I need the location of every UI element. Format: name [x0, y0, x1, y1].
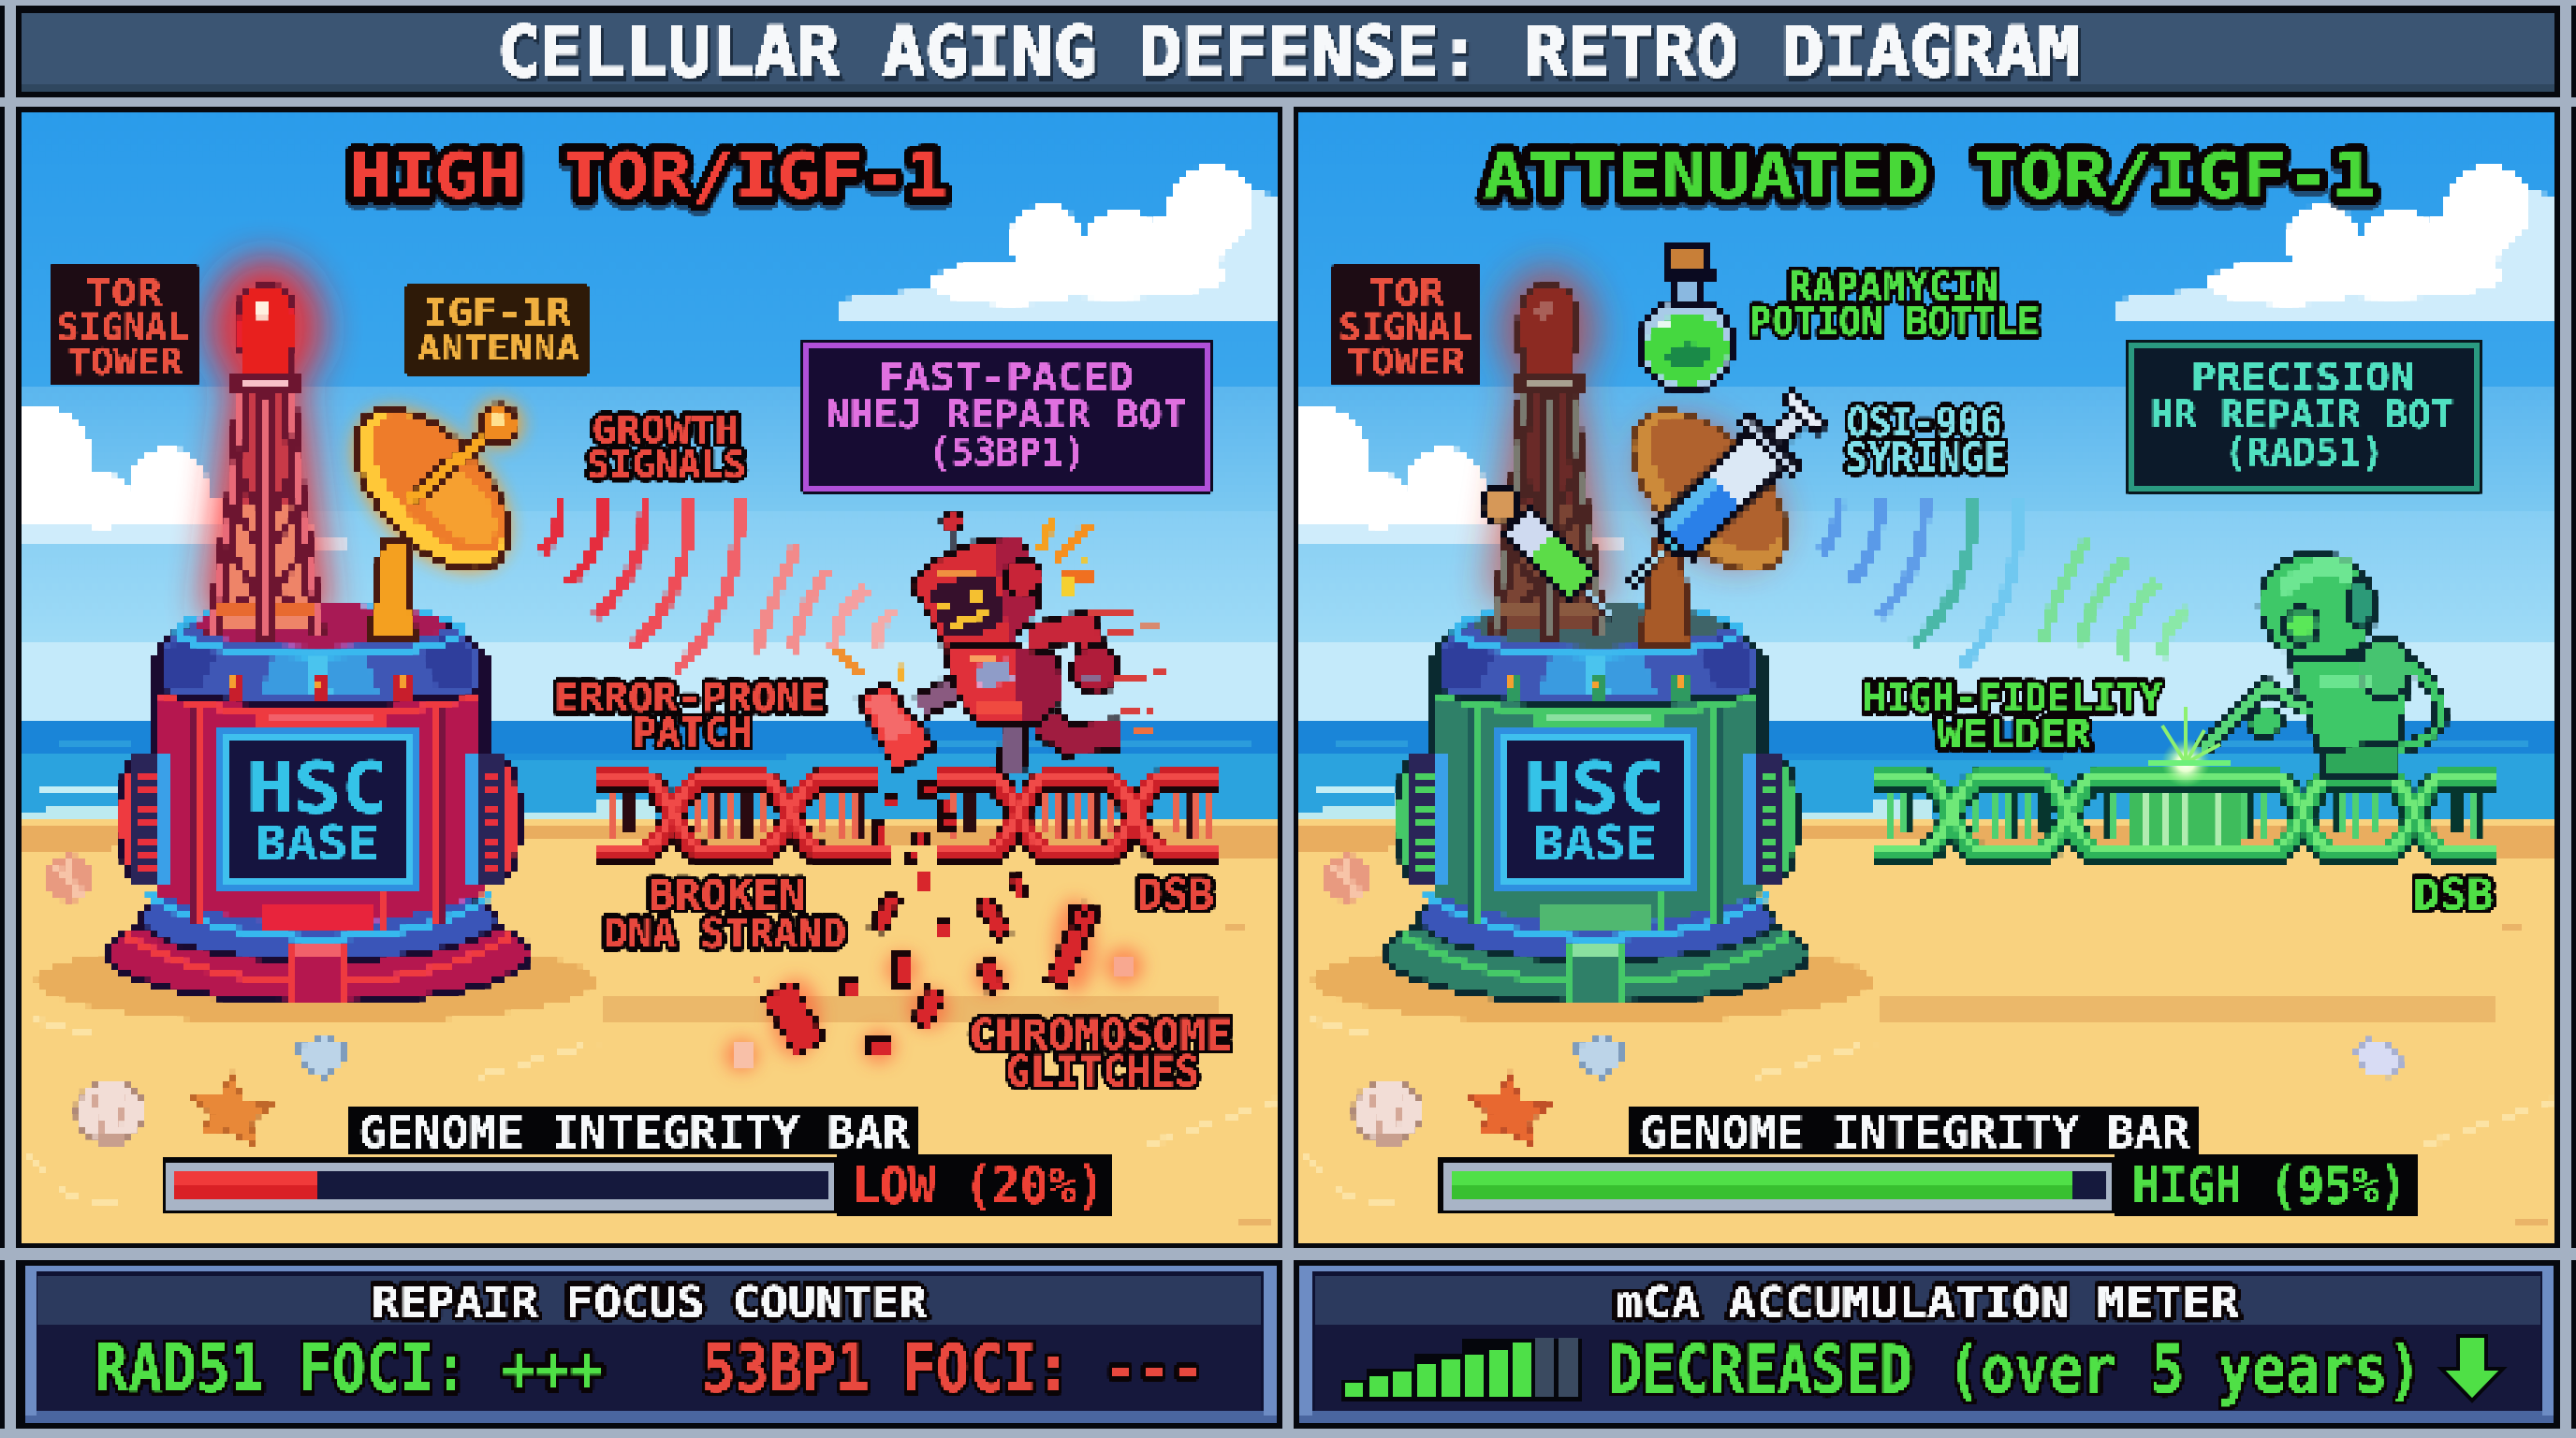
label: DSB: DSB — [2413, 870, 2494, 919]
labels layer — [50, 139, 1232, 1217]
heading: ATTENUATED TOR/IGF-1 — [1483, 139, 2376, 213]
label: OSI-906 syringe — [1845, 399, 2007, 482]
HSC base label — [246, 746, 388, 871]
label: error-prone patch: PATCH — [633, 710, 752, 756]
TOR signal tower, dimmed — [1491, 286, 1605, 642]
label: rapamycin potion bottle: POTION BOTTLE — [1749, 299, 2040, 345]
HSC base label: HSC — [1524, 746, 1666, 829]
HSC base label: BASE — [1533, 816, 1657, 871]
label: OSI-906 syringe: OSI-906 — [1847, 399, 2002, 447]
genome integrity bar: HIGH (95%) — [2132, 1156, 2407, 1215]
label: high-fidelity welder: WELDER — [1937, 712, 2091, 758]
panel title: REPAIR FOCUS COUNTER — [372, 1277, 927, 1328]
label: TOR signal tower — [1331, 264, 1481, 386]
chromosome debris — [763, 873, 1100, 1056]
meter bars — [1341, 1338, 1582, 1401]
label: NHEJ repair bot: NHEJ REPAIR BOT — [826, 392, 1187, 437]
label: IGF-1R antenna — [404, 285, 590, 375]
title bar — [22, 12, 2554, 93]
labels layer — [1331, 139, 2494, 1217]
label: chromosome glitches — [969, 1010, 1232, 1096]
label: high-fidelity welder — [1863, 675, 2162, 758]
label: chromosome glitches: GLITCHES — [1006, 1047, 1199, 1096]
IGF-1R antenna dish — [327, 383, 536, 640]
label: NHEJ repair bot: (53BP1) — [929, 430, 1086, 475]
label: HR repair bot: PRECISION — [2191, 355, 2415, 400]
IGF-1R dish, dimmed — [1604, 384, 1814, 644]
53BP1 foci readout: 53BP1 FOCI: --- — [702, 1330, 1204, 1407]
label: broken DNA strand: DNA STRAND — [604, 910, 846, 958]
label: HR repair bot: (RAD51) — [2224, 430, 2384, 475]
label: IGF-1R antenna: IGF-1R — [423, 291, 572, 334]
label: NHEJ repair bot — [801, 339, 1212, 493]
genome integrity bar: LOW (20%) — [852, 1156, 1105, 1215]
green repaired DNA helix — [1876, 774, 2497, 855]
decreased readout: DECREASED (over 5 years) — [1608, 1331, 2422, 1408]
HSC base station, green — [1385, 605, 1808, 1003]
heading: HIGH TOR/IGF-1 — [349, 139, 948, 213]
weld spark — [2148, 707, 2231, 787]
genome integrity bar: GENOME INTEGRITY BAR — [359, 1108, 910, 1158]
label: growth signals: SIGNALS — [587, 444, 746, 487]
label: TOR signal tower: SIGNAL — [57, 307, 189, 349]
label: chromosome glitches: CHROMOSOME — [969, 1010, 1232, 1060]
debris glow — [724, 899, 1143, 1072]
genome integrity bar — [1439, 1107, 2417, 1217]
label: TOR signal tower: TOWER — [67, 342, 183, 384]
pixel art layer — [44, 286, 1221, 1146]
attenuated signal waves — [1822, 496, 2188, 666]
label: HR repair bot — [2126, 339, 2482, 493]
title: CELLULAR AGING DEFENSE: RETRO DIAGRAM — [497, 12, 2081, 93]
label: TOR signal tower: TOR — [86, 272, 163, 315]
HSC base station — [108, 605, 531, 1003]
label: TOR signal tower: SIGNAL — [1339, 307, 1472, 349]
HSC base label: HSC — [246, 746, 388, 829]
beach shells and starfish — [44, 855, 344, 1146]
label: rapamycin potion bottle: RAPAMYCIN — [1789, 264, 1998, 311]
label: TOR signal tower: TOWER — [1347, 342, 1466, 384]
genome integrity bar: GENOME INTEGRITY BAR — [1639, 1108, 2189, 1158]
label: TOR signal tower: TOR — [1368, 272, 1445, 315]
TOR signal tower — [209, 286, 323, 642]
sparks — [833, 517, 1110, 683]
label: error-prone patch: ERROR-PRONE — [554, 675, 826, 722]
residual tower glow — [1486, 268, 1805, 599]
growth signal waves — [540, 496, 896, 672]
extra pebble — [2355, 1040, 2403, 1077]
panel: high TOR/IGF-1 — [0, 112, 1298, 1245]
pixel art layer — [1322, 246, 2497, 1146]
panel title: mCA ACCUMULATION METER — [1615, 1277, 2239, 1328]
label: DSB: DSB — [1137, 870, 1214, 919]
label: IGF-1R antenna: ANTENNA — [417, 329, 579, 369]
label: rapamycin potion bottle — [1749, 264, 2040, 345]
label: high-fidelity welder: HIGH-FIDELITY — [1863, 675, 2162, 722]
HR repair robot — [2203, 540, 2440, 775]
HSC base label — [1524, 746, 1666, 871]
tower and dish glow — [202, 258, 329, 618]
beach shells and starfish — [1322, 855, 1622, 1146]
rapamycin vial — [1473, 478, 1626, 631]
label: NHEJ repair bot: FAST-PACED — [879, 355, 1134, 400]
panel: attenuated TOR/IGF-1 — [1260, 112, 2575, 1245]
beach background — [1260, 112, 2575, 1245]
DSB break fragments — [875, 785, 956, 861]
label: broken DNA strand — [604, 872, 846, 958]
label: TOR signal tower — [50, 264, 199, 386]
icon: down arrow — [2441, 1336, 2503, 1401]
genome integrity bar — [162, 1107, 1113, 1217]
panel: repair focus counter — [25, 1266, 1277, 1423]
label: error-prone patch — [554, 675, 826, 756]
speed lines — [1089, 611, 1164, 736]
label: growth signals — [587, 409, 746, 487]
HSC base label: BASE — [256, 816, 379, 871]
broken DNA double helix — [599, 774, 1221, 855]
rapamycin potion bottle — [1640, 246, 1734, 391]
RAD51 foci readout: RAD51 FOCI: +++ — [95, 1330, 604, 1407]
label: OSI-906 syringe: SYRINGE — [1845, 434, 2007, 482]
label: broken DNA strand: BROKEN — [649, 872, 805, 919]
beach background — [0, 112, 1298, 1245]
NHEJ repair robot — [858, 512, 1119, 772]
label: growth signals: GROWTH — [592, 409, 739, 452]
OSI-906 syringe — [1605, 381, 1834, 609]
label: HR repair bot: HR REPAIR BOT — [2150, 392, 2454, 437]
panel: mCA accumulation meter — [1299, 1266, 2554, 1423]
